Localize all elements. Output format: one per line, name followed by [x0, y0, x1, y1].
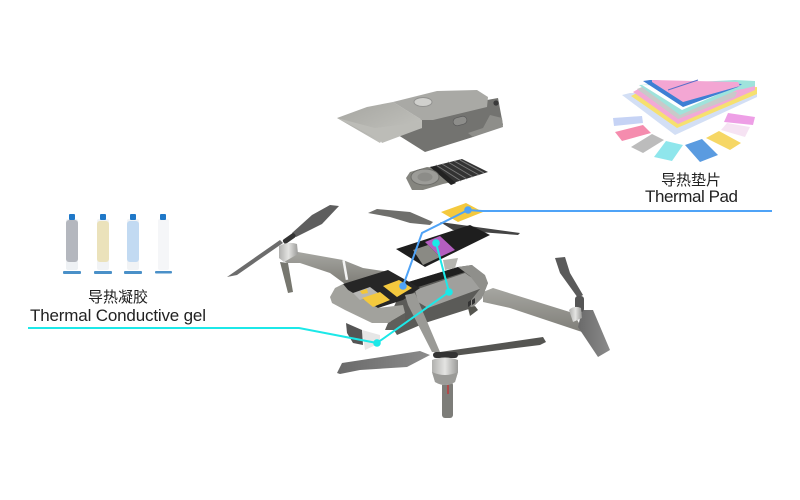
grey chip — [353, 287, 378, 300]
gimbal camera — [346, 323, 380, 350]
syringe blue — [124, 214, 142, 274]
rear left motor, leg and arm — [279, 243, 390, 293]
front yellow pad — [362, 292, 390, 307]
thermal conductive gel label — [30, 289, 206, 325]
thermal pad label — [645, 172, 738, 206]
drone rear body — [390, 265, 488, 335]
thermal pad label: 导热垫片 — [661, 172, 721, 189]
rear right arm, motor and propeller — [483, 257, 610, 357]
thermal conductive gel label: 导热凝胶 — [88, 289, 148, 306]
rear left propeller — [227, 205, 339, 277]
battery module — [337, 90, 503, 152]
top yellow thermal pad — [441, 203, 483, 222]
syringe grey — [63, 214, 81, 274]
front motor and leg — [432, 358, 458, 418]
circuit board — [396, 225, 490, 270]
small yellow pad — [360, 289, 368, 294]
drone front body with thermal pad locations — [330, 270, 420, 330]
rear yellow pad — [383, 280, 412, 297]
heat sink with fan — [406, 159, 488, 190]
thermal conductive gel label: Thermal Conductive gel — [30, 306, 206, 325]
thermal pad stack — [622, 80, 757, 135]
thermal pad label: Thermal Pad — [645, 187, 738, 206]
gel syringes — [63, 214, 172, 274]
front propeller — [337, 337, 546, 374]
upper propeller — [368, 209, 520, 235]
front right arm — [405, 293, 440, 352]
small thermal pad samples — [613, 113, 755, 162]
purple thermal gel area — [425, 236, 455, 257]
blue leader line for thermal pad — [399, 206, 772, 290]
syringe yellow — [94, 214, 112, 274]
syringe white — [155, 214, 172, 274]
grey chip on board — [413, 245, 440, 265]
cyan leader line for thermal gel — [28, 239, 453, 347]
